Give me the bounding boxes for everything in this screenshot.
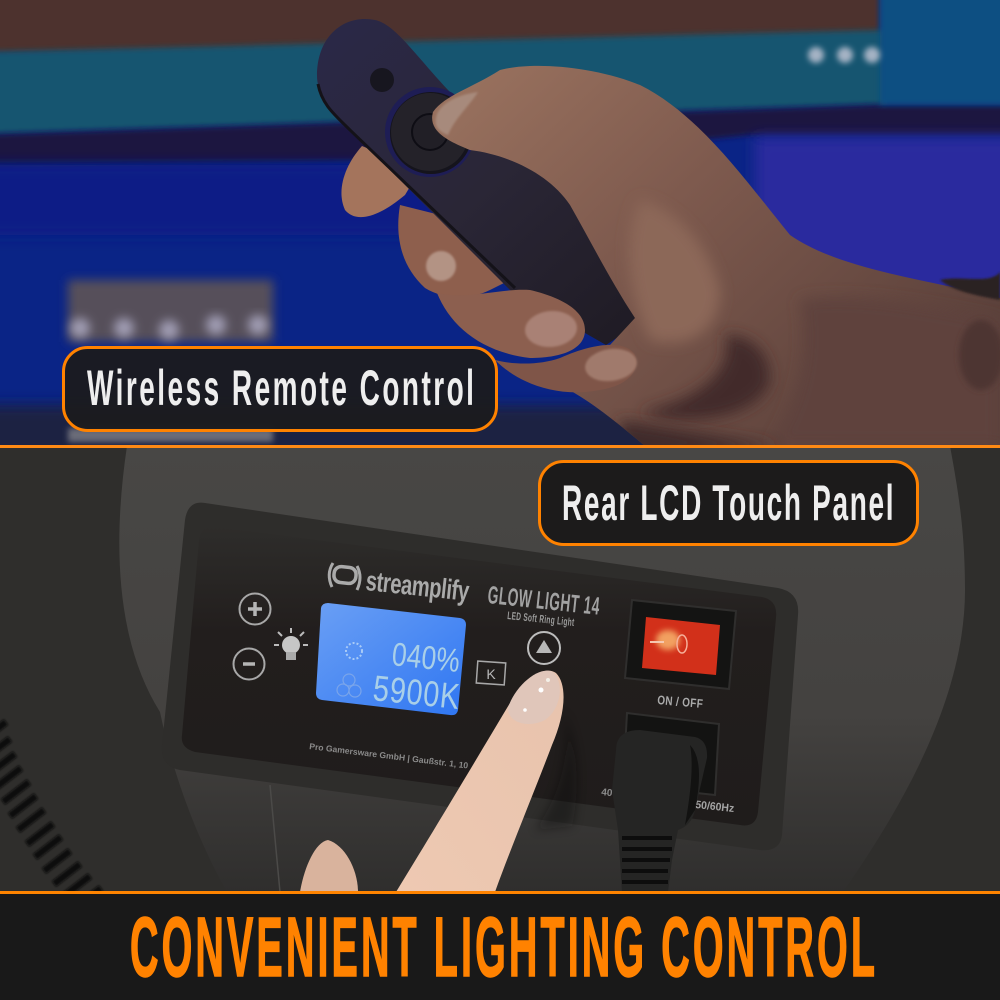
- icon: power switch: [625, 600, 736, 689]
- heading: product name: GLOW LIGHT 14: [486, 582, 601, 621]
- icon: wireless remote: [317, 19, 660, 345]
- icon: K button: K: [486, 666, 496, 682]
- LCD screen: 040%: [390, 636, 462, 680]
- icon: bulb: [274, 628, 308, 660]
- icon: second fingertip: [300, 840, 358, 892]
- icon: plus button: [240, 594, 270, 624]
- power specs: [601, 788, 734, 812]
- power specs: 50/60Hz: [695, 799, 735, 815]
- photo: rear LCD touch panel: [0, 446, 1000, 908]
- icon: blurred screen dots: [808, 47, 880, 63]
- icon: palm and thumb: [432, 66, 1000, 460]
- title: CONVENIENT LIGHTING CONTROL: [130, 900, 875, 994]
- icon: index and middle fingers: [341, 146, 510, 297]
- icon: minus button: [234, 648, 264, 680]
- icon: up button: [528, 632, 560, 664]
- icon: blurred lights: [70, 315, 268, 340]
- finger shadow: [539, 800, 576, 830]
- footer banner: [0, 894, 1000, 1000]
- icon: little finger: [495, 345, 639, 392]
- callout: wireless remote control: [64, 348, 496, 430]
- icon: fingernail: [508, 671, 560, 724]
- address text: Pro Gamersware GmbH | Gaußstr. 1, 10: [309, 741, 469, 771]
- icon: ring finger: [437, 290, 585, 358]
- photo: hand holding wireless remote: [0, 0, 1000, 465]
- power specs: 40V: [601, 787, 620, 800]
- panel: control plate: [162, 503, 798, 892]
- vent lines: [0, 722, 101, 908]
- label: on off: ON / OFF: [657, 694, 703, 711]
- LCD screen: 5900K: [371, 667, 462, 717]
- power socket and plug: [612, 713, 719, 892]
- icon: K button: [476, 661, 506, 685]
- logo: streamplify: streamplify: [364, 566, 471, 608]
- ring housing: [120, 448, 965, 826]
- LCD screen: [316, 603, 466, 717]
- icon: pointing finger: [396, 671, 564, 892]
- logo: streamplify: [329, 563, 471, 608]
- heading: product name: LED Soft Ring Light: [507, 609, 575, 628]
- callout: wireless remote control: Wireless Remote Control: [87, 359, 474, 416]
- divider: orange rules: [0, 445, 1000, 894]
- callout: rear LCD touch panel: [540, 462, 918, 544]
- callout: rear LCD touch panel: Rear LCD Touch Panel: [562, 474, 894, 531]
